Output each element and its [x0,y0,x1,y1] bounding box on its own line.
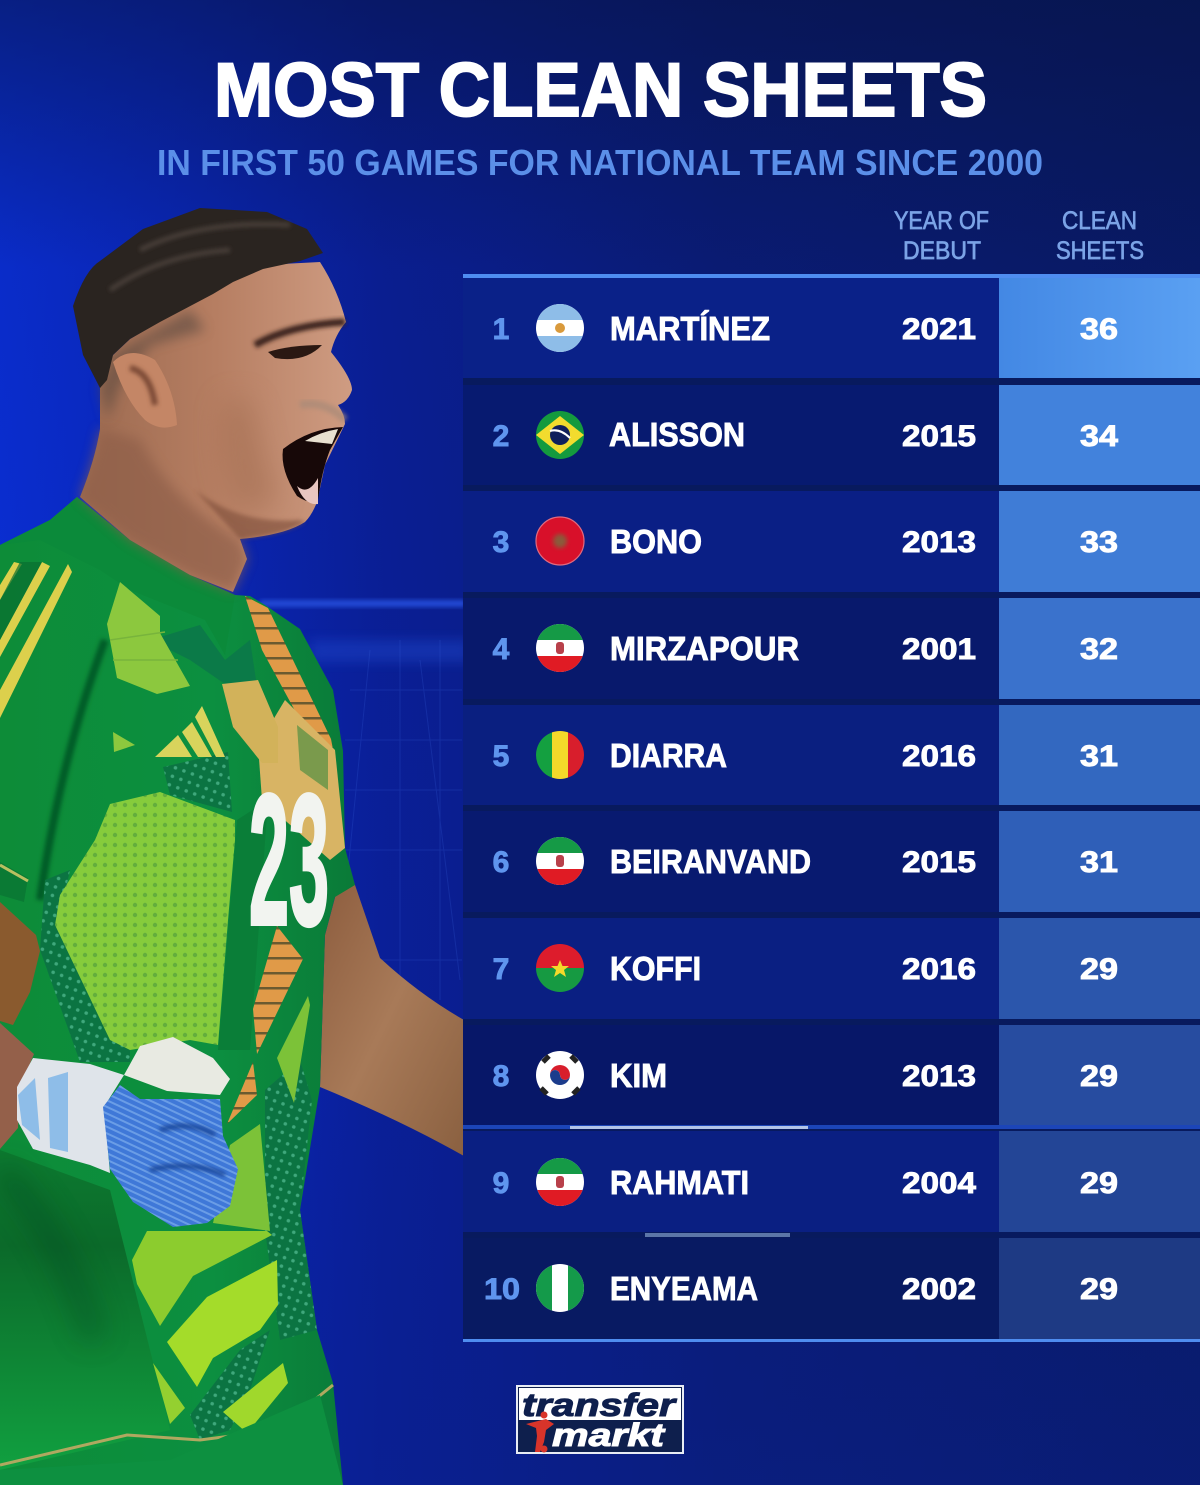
rank: 3 [493,526,509,559]
flag: Mali [536,731,584,779]
head [73,208,352,592]
jersey: 23 [249,757,329,964]
year: 2013 [902,526,976,559]
rank: 4 [493,633,510,666]
year: 2015 [902,846,976,879]
name: BONO [610,523,702,560]
flag: Iran [536,837,584,885]
flag: Brazil [536,411,584,459]
row 1 [463,278,1200,378]
year: 2002 [902,1273,976,1306]
column header: clean sheets [1056,207,1144,265]
clean sheets: 29 [1080,953,1118,986]
logo: transfermarkt: transfer [522,1387,677,1423]
rank: 8 [493,1060,509,1093]
year: 2004 [902,1167,976,1200]
column header: year of debut: DEBUT [903,237,981,265]
year: 2013 [902,1060,976,1093]
flag: South Korea [536,1051,584,1099]
row 10 [463,1233,1200,1339]
flag: Morocco [536,517,584,565]
clean sheets: 33 [1080,526,1118,559]
left arm [0,902,40,1025]
row 5 [463,705,1200,805]
fade above ear [100,310,205,420]
brow and eye [255,322,345,345]
light green shoulder patch [107,582,190,694]
adidas stripes logo [155,706,225,757]
goalkeeper glove [17,1037,238,1227]
clean sheets: 36 [1080,313,1118,346]
row 2 [463,385,1200,485]
name: BEIRANVAND [610,843,811,880]
year: 2021 [902,313,976,346]
hem trim [0,1385,333,1465]
row 3 [463,491,1200,592]
rank: 5 [493,740,509,773]
name: MIRZAPOUR [610,630,799,667]
row 9 [463,1125,1200,1232]
lime lower panels [213,996,310,1231]
collar [0,497,235,655]
flag: Nigeria [536,1264,584,1312]
open mouth [283,427,343,502]
year: 2001 [902,633,976,666]
clean sheets: 29 [1080,1167,1118,1200]
rank: 1 [493,313,509,346]
name: RAHMATI [610,1164,749,1201]
table [463,274,1200,1342]
ear [113,353,177,428]
teal dotted bands [40,870,130,1062]
player photo: goalkeeper celebrating [0,208,464,1485]
year: 2016 [902,953,976,986]
subtitle: IN FIRST 50 GAMES FOR NATIONAL TEAM SINCE 2000 [157,142,1043,183]
clean sheets: 31 [1080,740,1118,773]
name: KIM [610,1057,667,1094]
year: 2016 [902,740,976,773]
column header: clean sheets: CLEAN [1062,207,1137,235]
right arm [320,860,464,1156]
column header: clean sheets: SHEETS [1056,237,1144,265]
row 4 [463,598,1200,699]
orange diagonal panel [245,596,335,760]
icon: red footballer [526,1412,554,1452]
title: MOST CLEAN SHEETS [214,48,987,133]
shoulder stripes [0,562,72,718]
rank: 10 [484,1273,520,1306]
name: KOFFI [610,950,701,987]
name: MARTÍNEZ [610,310,770,347]
flag: Argentina [536,304,584,352]
clean sheets: 31 [1080,846,1118,879]
row 6 [463,811,1200,912]
sleeve seam [40,640,105,900]
column header: year of debut [894,207,989,265]
clean sheets: 29 [1080,1060,1118,1093]
logo: transfermarkt: markt [552,1417,666,1453]
hair [73,208,323,388]
clean sheets: 32 [1080,633,1118,666]
clean sheets: 29 [1080,1273,1118,1306]
flag: Burkina Faso [536,944,584,992]
large chest panel [55,792,235,1050]
rank: 9 [493,1167,509,1200]
row 8 [463,1025,1200,1125]
flag: Iran [536,1158,584,1206]
jersey [0,497,355,1485]
rank: 7 [493,953,509,986]
name: ENYEAMA [610,1270,758,1307]
federation crest [222,680,278,763]
name: DIARRA [610,737,727,774]
year: 2015 [902,420,976,453]
row 7 [463,918,1200,1019]
logo: transfermarkt [517,1386,683,1453]
clean sheets: 34 [1080,420,1118,453]
rank: 6 [493,846,509,879]
rank: 2 [493,420,509,453]
flag: Iran [536,624,584,672]
column header: year of debut: YEAR OF [894,207,989,235]
name: ALISSON [609,416,745,453]
